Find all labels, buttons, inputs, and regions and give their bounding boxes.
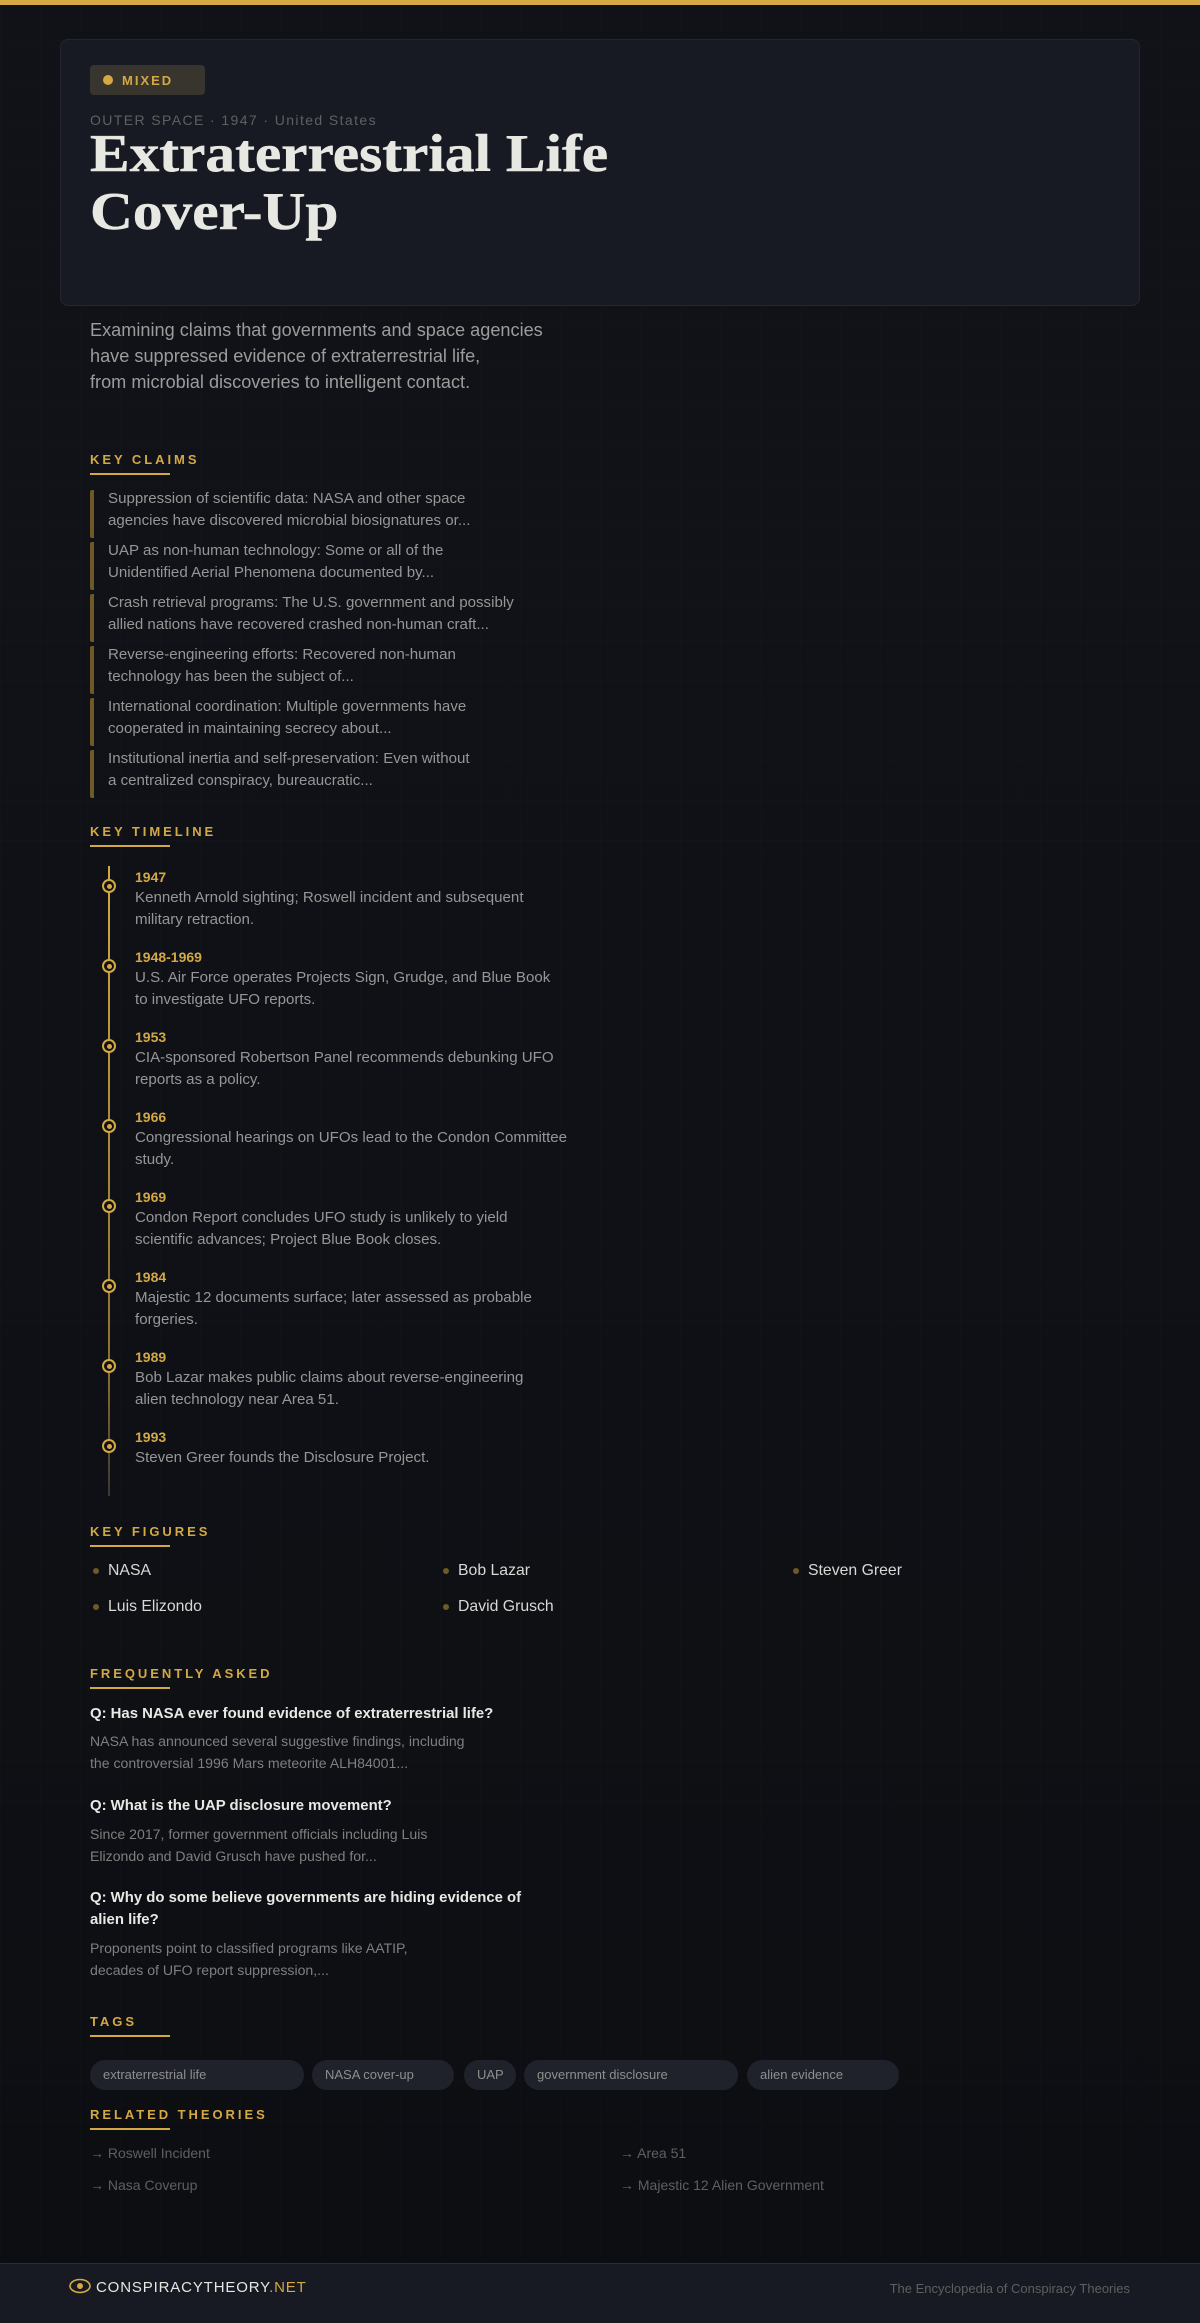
figure: Steven Greer: Steven Greer [808, 1562, 902, 1579]
event 1948-1969: 1948-1969 [135, 949, 202, 965]
event 1993 [102, 1429, 429, 1466]
footer tagline: The Encyclopedia of Conspiracy Theories [890, 2281, 1130, 2296]
event 1948-1969: U.S. Air Force operates Projects Sign, Grudge, and Blue Book [135, 969, 550, 986]
intro text [90, 320, 543, 392]
related theory links [90, 2145, 824, 2193]
footer logo text: CONSPIRACYTHEORY.NET [96, 2279, 307, 2296]
panel: hero header [60, 39, 1140, 306]
tag: extraterrestrial life [103, 2067, 206, 2082]
link: Roswell Incident: → Roswell Incident [90, 2145, 210, 2161]
event 1948-1969 [102, 949, 550, 1008]
answer 2: Elizondo and David Grusch have pushed for... [90, 1848, 377, 1864]
claim 4 [90, 646, 560, 694]
event 1989 [102, 1349, 523, 1408]
figure: Bob Lazar: Bob Lazar [458, 1562, 530, 1579]
tag: government disclosure [537, 2067, 668, 2082]
intro text: have suppressed evidence of extraterrestrial life, [90, 346, 480, 366]
answer 1: NASA has announced several suggestive findings, including [90, 1733, 465, 1749]
event 1953: reports as a policy. [135, 1071, 261, 1088]
claim 5: cooperated in maintaining secrecy about... [108, 720, 392, 737]
title: Extraterrestrial Life [90, 125, 608, 183]
link: Area 51: → Area 51 [620, 2145, 686, 2161]
heading: key figures: KEY FIGURES [90, 1524, 210, 1539]
claim 5 [90, 698, 560, 746]
icon: verdict dot [103, 75, 113, 85]
icon: eye logo [69, 2278, 91, 2294]
tag [90, 2060, 304, 2090]
heading: related theories: RELATED THEORIES [90, 2107, 268, 2122]
claim 6: a centralized conspiracy, bureaucratic... [108, 772, 373, 789]
badge: mixed verdict [90, 65, 205, 95]
answer 1: the controversial 1996 Mars meteorite ALH84001... [90, 1755, 408, 1771]
answer 2 [90, 1826, 427, 1864]
answer 2: Since 2017, former government officials including Luis [90, 1826, 427, 1842]
event 1966: Congressional hearings on UFOs lead to the Condon Committee [135, 1129, 567, 1146]
heading: frequently asked: FREQUENTLY ASKED [90, 1666, 273, 1681]
claim 5: International coordination: Multiple governments have [108, 698, 466, 715]
event 1993: 1993 [135, 1429, 166, 1445]
tag: UAP [477, 2067, 504, 2082]
event 1953: CIA-sponsored Robertson Panel recommends debunking UFO [135, 1049, 554, 1066]
category and date line: OUTER SPACE · 1947 · United States [90, 112, 377, 128]
title [90, 125, 608, 241]
event 1948-1969: to investigate UFO reports. [135, 991, 315, 1008]
claim 4: technology has been the subject of... [108, 668, 354, 685]
event 1947: Kenneth Arnold sighting; Roswell incident and subsequent [135, 889, 524, 906]
question 3: Q: Why do some believe governments are hiding evidence of [90, 1890, 521, 1906]
intro text: Examining claims that governments and space agencies [90, 320, 543, 340]
tag [464, 2060, 516, 2090]
heading: tags: TAGS [90, 2014, 137, 2029]
claim 1 [90, 490, 560, 538]
event 1984: 1984 [135, 1269, 166, 1285]
heading: key claims: KEY CLAIMS [90, 452, 199, 467]
tag: alien evidence [760, 2067, 843, 2082]
claim 3: allied nations have recovered crashed non-human craft... [108, 616, 489, 633]
event 1947 [102, 869, 524, 928]
event 1989: alien technology near Area 51. [135, 1391, 339, 1408]
claim 1: Suppression of scientific data: NASA and other space [108, 490, 465, 507]
tag [747, 2060, 899, 2090]
badge label: MIXED [122, 73, 173, 88]
title: Cover-Up [90, 183, 338, 241]
link: Majestic 12 Alien Government: → Majestic 12 Alien Government [620, 2177, 824, 2193]
event 1966: study. [135, 1151, 174, 1168]
event 1966 [102, 1109, 567, 1168]
event 1969: Condon Report concludes UFO study is unlikely to yield [135, 1209, 508, 1226]
claim 6: Institutional inertia and self-preservation: Even without [108, 750, 470, 767]
question 2: Q: What is the UAP disclosure movement? [90, 1798, 392, 1814]
answer 3 [90, 1940, 408, 1978]
list: key figures [93, 1562, 902, 1615]
claim 2: UAP as non-human technology: Some or all of the [108, 542, 443, 559]
answer 3: decades of UFO report suppression,... [90, 1962, 329, 1978]
event 1993: Steven Greer founds the Disclosure Project. [135, 1449, 429, 1466]
figure: Luis Elizondo: Luis Elizondo [108, 1598, 202, 1615]
event 1969 [102, 1189, 508, 1248]
claim 2 [90, 542, 560, 590]
question 3: alien life? [90, 1912, 159, 1928]
question 1: Q: Has NASA ever found evidence of extraterrestrial life? [90, 1706, 493, 1722]
footer [0, 2263, 1200, 2323]
event 1969: 1969 [135, 1189, 166, 1205]
FAQ list [90, 1706, 522, 1978]
question 3 [90, 1890, 522, 1928]
timeline axis [108, 866, 110, 1496]
claim 3: Crash retrieval programs: The U.S. government and possibly [108, 594, 514, 611]
event 1947: military retraction. [135, 911, 254, 928]
claim 1: agencies have discovered microbial biosignatures or... [108, 512, 470, 529]
claim 2: Unidentified Aerial Phenomena documented by... [108, 564, 434, 581]
heading: key timeline: KEY TIMELINE [90, 824, 216, 839]
event 1969: scientific advances; Project Blue Book closes. [135, 1231, 441, 1248]
figure: David Grusch: David Grusch [458, 1598, 554, 1615]
event 1989: 1989 [135, 1349, 166, 1365]
event 1984: Majestic 12 documents surface; later assessed as probable [135, 1289, 532, 1306]
figure: NASA: NASA [108, 1562, 151, 1579]
answer 3: Proponents point to classified programs like AATIP, [90, 1940, 408, 1956]
link: Nasa Coverup: → Nasa Coverup [90, 2177, 197, 2193]
tag: NASA cover-up [325, 2067, 414, 2082]
tag [312, 2060, 454, 2090]
event 1947: 1947 [135, 869, 166, 885]
event 1984 [102, 1269, 532, 1328]
tag pills [90, 2060, 899, 2090]
event 1953: 1953 [135, 1029, 166, 1045]
event 1989: Bob Lazar makes public claims about reverse-engineering [135, 1369, 523, 1386]
claim 6 [90, 750, 560, 798]
event 1953 [102, 1029, 554, 1088]
intro text: from microbial discoveries to intelligent contact. [90, 372, 470, 392]
claim 3 [90, 594, 560, 642]
claim 4: Reverse-engineering efforts: Recovered non-human [108, 646, 456, 663]
event 1966: 1966 [135, 1109, 166, 1125]
list: key claims [90, 490, 514, 798]
timeline [102, 866, 567, 1496]
tag [524, 2060, 738, 2090]
top accent bar [0, 0, 1200, 5]
answer 1 [90, 1733, 465, 1771]
event 1984: forgeries. [135, 1311, 198, 1328]
